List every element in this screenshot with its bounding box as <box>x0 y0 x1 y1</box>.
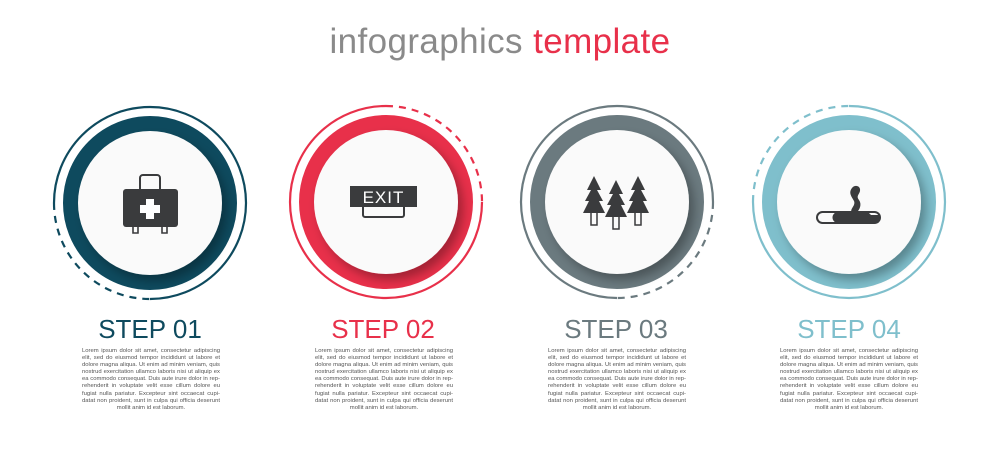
step 1 text: mollit anim id est laborum. <box>117 405 185 411</box>
icon: trees <box>583 176 649 229</box>
step 3 text: nostrud exercitation ullamco laboris nisi ut aliquip ex <box>548 369 686 375</box>
step 3 text: datat non proident, sunt in culpa qui officia deserunt <box>548 398 686 404</box>
step 3 text: elit, sed do eiusmod tempor incididunt ut labore et <box>548 355 686 361</box>
step 4 text: Lorem ipsum dolor sit amet, consectetur adipiscing <box>780 348 918 354</box>
step 2 text <box>315 348 453 411</box>
step 1 text: rehenderit in voluptate velit esse cillum dolore eu <box>82 383 220 389</box>
step 2 text: elit, sed do eiusmod tempor incididunt ut labore et <box>315 355 453 361</box>
step 1 text: fugiat nulla pariatur. Excepteur sint occaecat cupi- <box>82 391 220 397</box>
step 3 text <box>548 348 686 411</box>
step 3 circle <box>521 106 713 298</box>
step 3 text: fugiat nulla pariatur. Excepteur sint occaecat cupi- <box>548 391 686 397</box>
step 2 label: STEP 02 <box>331 314 435 344</box>
step 3 text: ea commodo consequat. Duis aute irure dolor in rep- <box>548 376 686 382</box>
icon: exit sign: EXIT <box>363 188 404 207</box>
step 2 text: rehenderit in voluptate velit esse cillum dolore eu <box>315 383 453 389</box>
step 3 label: STEP 03 <box>564 314 668 344</box>
step 2 text: ea commodo consequat. Duis aute irure dolor in rep- <box>315 376 453 382</box>
title: infographics template <box>329 22 671 61</box>
step 4 text: datat non proident, sunt in culpa qui officia deserunt <box>780 398 918 404</box>
step 1 text: dolore magna aliqua. Ut enim ad minim veniam, quis <box>82 362 220 368</box>
step 4 text: dolore magna aliqua. Ut enim ad minim veniam, quis <box>780 362 918 368</box>
icon: exit sign <box>350 186 417 217</box>
step 1 text: datat non proident, sunt in culpa qui officia deserunt <box>82 398 220 404</box>
step 1 circle <box>54 107 246 299</box>
step 2 text: datat non proident, sunt in culpa qui officia deserunt <box>315 398 453 404</box>
step 2 circle <box>290 106 482 298</box>
step 3 text: dolore magna aliqua. Ut enim ad minim veniam, quis <box>548 362 686 368</box>
step 1 text: Lorem ipsum dolor sit amet, consectetur adipiscing <box>82 348 220 354</box>
step 3 text: mollit anim id est laborum. <box>583 405 651 411</box>
step 4 text <box>780 348 918 411</box>
icon: first aid kit <box>123 175 178 233</box>
step 1 text: ea commodo consequat. Duis aute irure dolor in rep- <box>82 376 220 382</box>
step 2 text: fugiat nulla pariatur. Excepteur sint occaecat cupi- <box>315 391 453 397</box>
step 1 text: nostrud exercitation ullamco laboris nisi ut aliquip ex <box>82 369 220 375</box>
step 3 text: Lorem ipsum dolor sit amet, consectetur adipiscing <box>548 348 686 354</box>
step 4 text: nostrud exercitation ullamco laboris nisi ut aliquip ex <box>780 369 918 375</box>
step 2 text: dolore magna aliqua. Ut enim ad minim veniam, quis <box>315 362 453 368</box>
step 3 text: rehenderit in voluptate velit esse cillum dolore eu <box>548 383 686 389</box>
step 4 text: mollit anim id est laborum. <box>815 405 883 411</box>
step 1 text: elit, sed do eiusmod tempor incididunt ut labore et <box>82 355 220 361</box>
step 4 circle <box>753 106 945 298</box>
step 2 text: nostrud exercitation ullamco laboris nisi ut aliquip ex <box>315 369 453 375</box>
step 1 label: STEP 01 <box>98 314 202 344</box>
step 1 text <box>82 348 220 411</box>
step 4 text: ea commodo consequat. Duis aute irure dolor in rep- <box>780 376 918 382</box>
step 2 text: Lorem ipsum dolor sit amet, consectetur adipiscing <box>315 348 453 354</box>
step 4 text: rehenderit in voluptate velit esse cillum dolore eu <box>780 383 918 389</box>
step 4 text: elit, sed do eiusmod tempor incididunt ut labore et <box>780 355 918 361</box>
step 4 label: STEP 04 <box>797 314 901 344</box>
icon: cigarette <box>817 186 880 223</box>
step 4 text: fugiat nulla pariatur. Excepteur sint occaecat cupi- <box>780 391 918 397</box>
step 2 text: mollit anim id est laborum. <box>350 405 418 411</box>
